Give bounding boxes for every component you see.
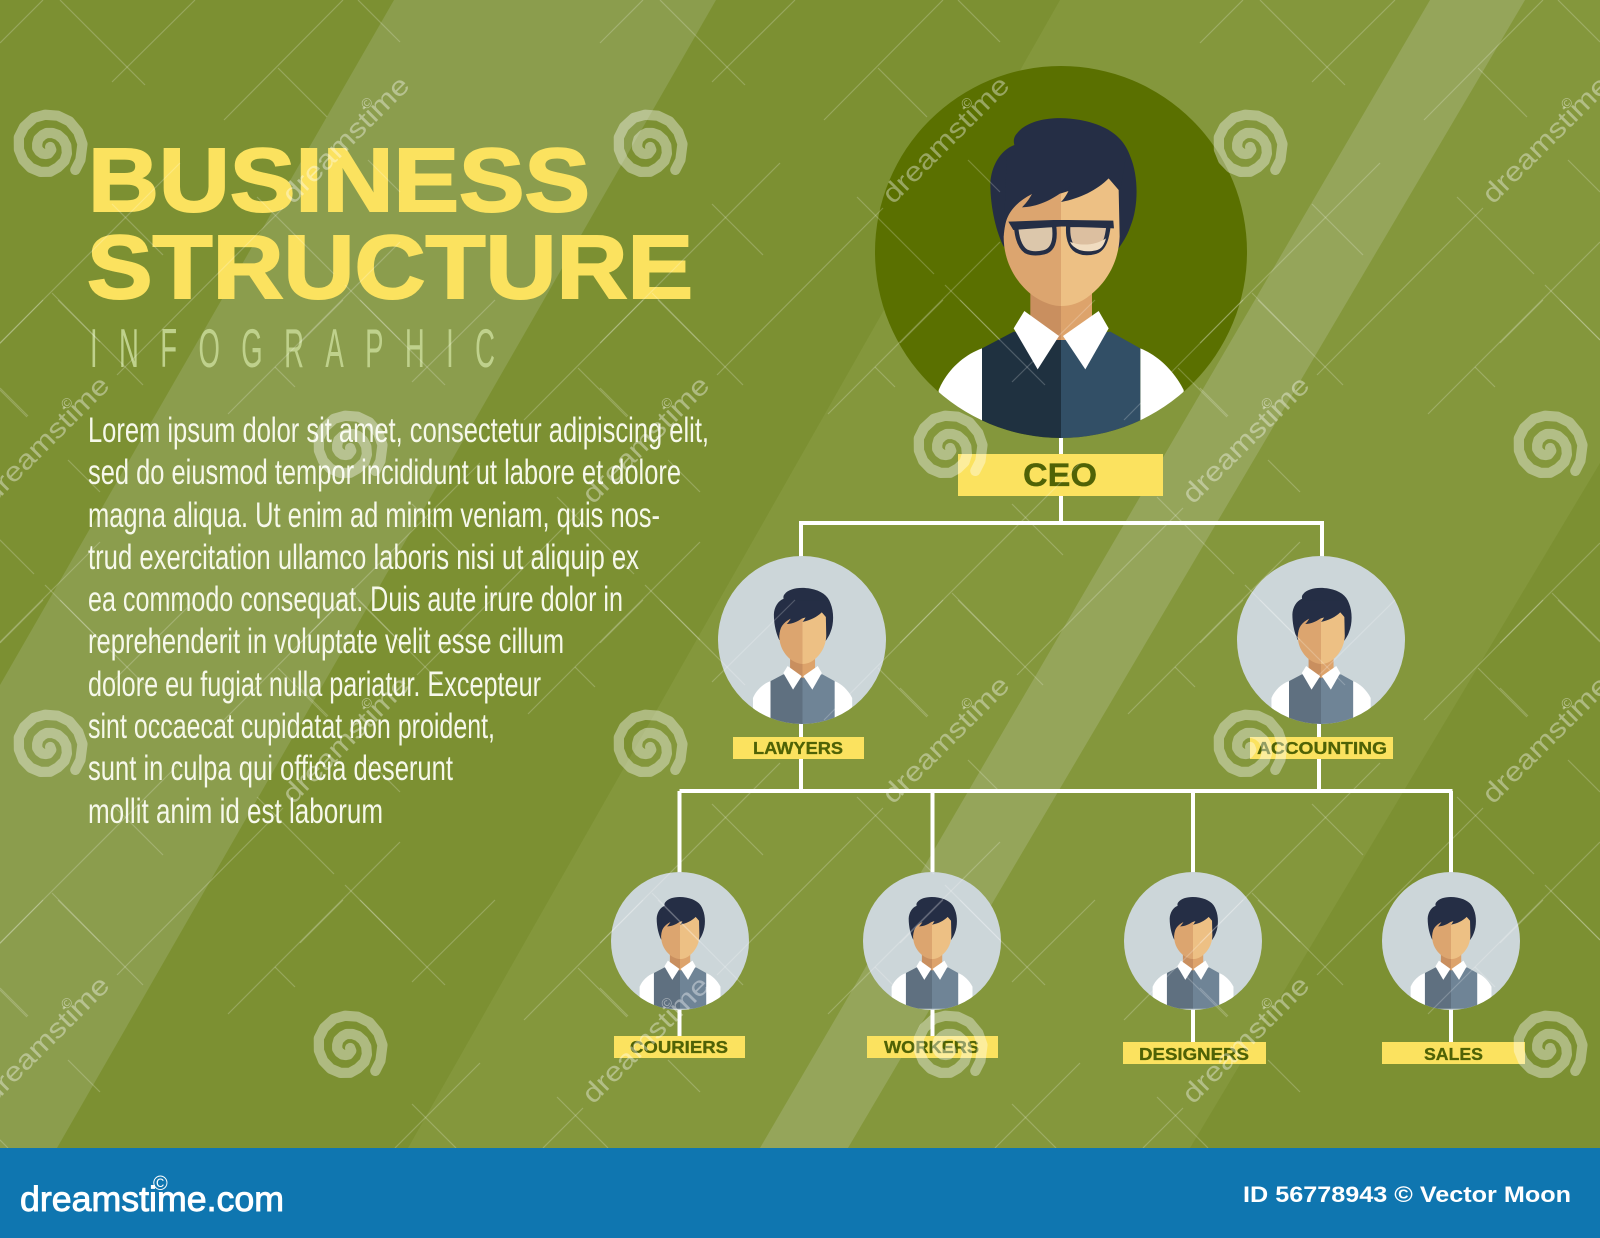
watermark: dreamstime text: © [357, 93, 376, 112]
footer bar: dreamstime.com [20, 1180, 284, 1219]
footer bar: ID 56778943 © Vector Moon [1243, 1182, 1571, 1207]
node: designers portrait [1124, 872, 1262, 1010]
label: designers: DESIGNERS [1139, 1044, 1249, 1064]
watermark: dreamstime text: dreamstime [276, 670, 415, 809]
label: workers: WORKERS [884, 1037, 979, 1057]
body text block: Lorem ipsum dolor sit amet, consectetur adipiscing elit, [88, 411, 709, 450]
node: lawyers portrait [718, 556, 886, 725]
watermark: dreamstime text: © [57, 393, 76, 412]
node: couriers portrait [611, 872, 749, 1010]
watermark: dreamstime text: © [357, 693, 376, 712]
watermark: dreamstime text: dreamstime [1476, 670, 1600, 809]
watermark: dreamstime text: © [957, 693, 976, 712]
body text block: magna aliqua. Ut enim ad minim veniam, quis nos- [88, 496, 660, 535]
watermark: dreamstime text: © [657, 393, 676, 412]
body text block: trud exercitation ullamco laboris nisi ut aliquip ex [88, 538, 639, 577]
body text block: sint occaecat cupidatat non proident, [88, 707, 495, 746]
watermark: dreamstime text: © [957, 93, 976, 112]
body text block: sed do eiusmod tempor incididunt ut labore et dolore [88, 453, 681, 492]
node: sales portrait [1382, 872, 1520, 1010]
footer bar: © [153, 1173, 168, 1195]
label: sales [1382, 1042, 1525, 1064]
watermark: dreamstime text: © [657, 993, 676, 1012]
label: lawyers: LAWYERS [753, 738, 843, 758]
label: accounting: ACCOUNTING [1257, 738, 1387, 758]
title: BUSINESS [88, 131, 590, 231]
body text block [88, 411, 709, 831]
watermark: dreamstime text: dreamstime [1176, 970, 1315, 1109]
watermark: dreamstime text: dreamstime [1176, 370, 1315, 509]
watermark: dreamstime text: © [1257, 993, 1276, 1012]
watermark: dreamstime text: dreamstime [576, 970, 715, 1109]
watermark: spirals [19, 115, 1582, 1073]
watermark: dreamstime text: © [1557, 693, 1576, 712]
watermark: dreamstime text: dreamstime [276, 70, 415, 209]
watermark: dreamstime text: dreamstime [876, 670, 1015, 809]
label: couriers [614, 1036, 745, 1058]
node: accounting portrait [1237, 556, 1405, 725]
footer bar [0, 1148, 1600, 1238]
label: workers [867, 1036, 998, 1058]
label: CEO [958, 454, 1163, 496]
subtitle: infographic: INFOGRAPHIC [90, 319, 495, 380]
body text block: dolore eu fugiat nulla pariatur. Excepteur [88, 665, 541, 704]
label: designers [1123, 1042, 1266, 1064]
org chart connectors [680, 430, 1452, 1045]
label: couriers: COURIERS [630, 1037, 728, 1057]
title [87, 131, 693, 318]
watermark: dreamstime text: © [57, 993, 76, 1012]
body text block: sunt in culpa qui officia deserunt [88, 749, 453, 788]
body text block: ea commodo consequat. Duis aute irure dolor in [88, 580, 623, 619]
label: CEO: CEO [1023, 457, 1097, 493]
watermark: dreamstime text: © [1257, 393, 1276, 412]
watermark: dreamstime text: dreamstime [876, 70, 1015, 209]
body text block: mollit anim id est laborum [88, 792, 383, 831]
label: lawyers [733, 737, 864, 759]
node: workers portrait [863, 872, 1001, 1010]
node: CEO portrait [875, 66, 1247, 457]
watermark: dreamstime text: © [1557, 93, 1576, 112]
label: sales: SALES [1424, 1044, 1483, 1064]
body text block: reprehenderit in voluptate velit esse cillum [88, 622, 564, 661]
watermark: dreamstime text: dreamstime [1476, 70, 1600, 209]
title: STRUCTURE [87, 218, 693, 318]
watermark: dreamstime text: dreamstime [576, 370, 715, 509]
